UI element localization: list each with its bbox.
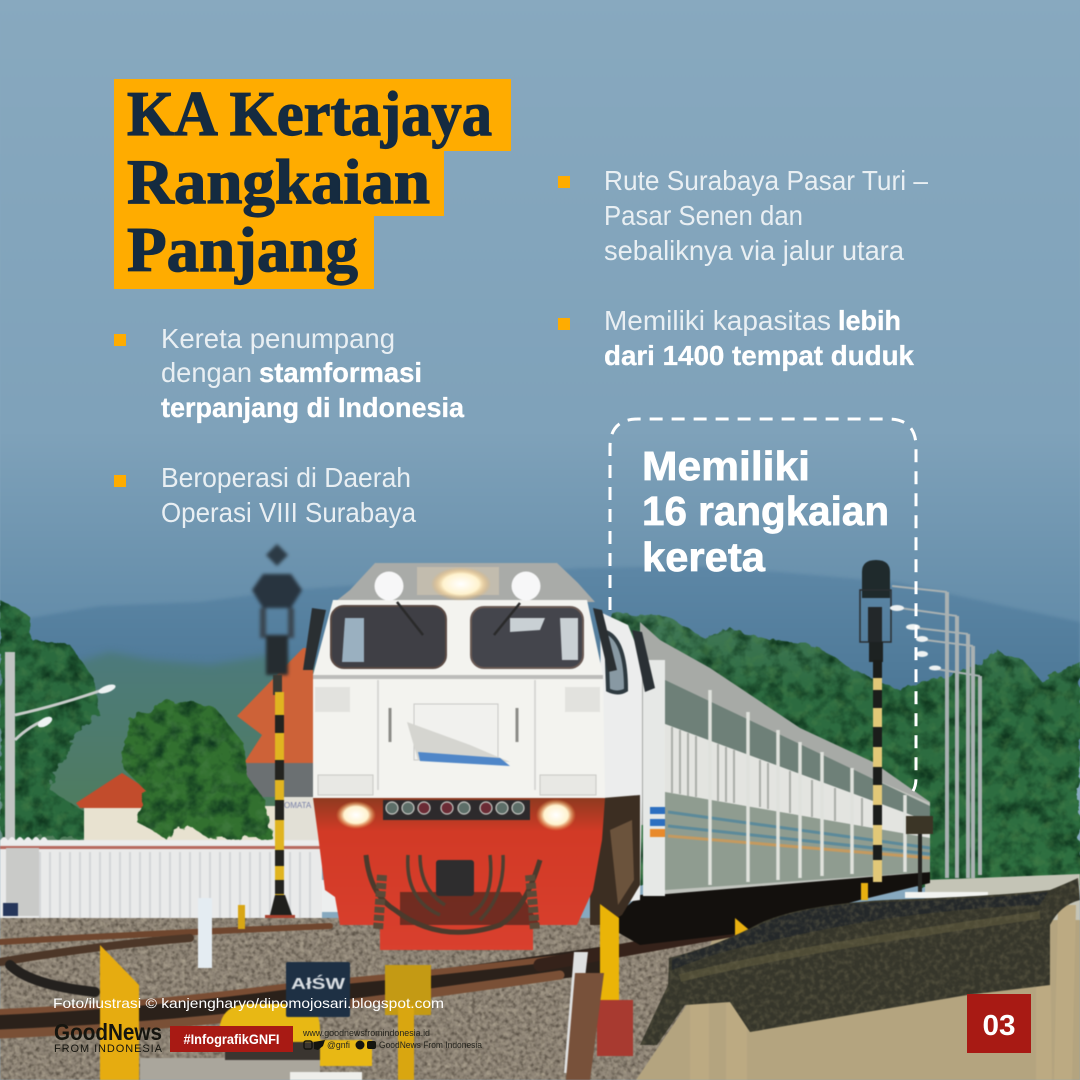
- coach dividers: [710, 690, 905, 885]
- callout text: Memiliki: [642, 443, 810, 489]
- footer links and social icons: [302, 1028, 482, 1050]
- top headlights: [374, 572, 404, 600]
- foreground: bamboo poles: [690, 905, 1076, 1080]
- ground: gravel and dry grass: [0, 874, 1080, 1080]
- vents: [315, 687, 600, 712]
- hazy tree line left: [0, 652, 330, 845]
- nose seams: [378, 680, 535, 790]
- left window: [331, 606, 446, 668]
- foreground: small yellow markers: [735, 883, 988, 938]
- houses with orange roofs: [76, 648, 324, 842]
- foreground: mirrored track sign: AłŚW: [291, 974, 346, 993]
- title: Rangkaian: [127, 147, 430, 217]
- hashtag badge: #InfografikGNFI: [184, 1032, 280, 1047]
- white station fence: [0, 837, 338, 922]
- cab body: [313, 600, 605, 798]
- page number: 03: [982, 1010, 1016, 1042]
- logo: GoodNews From Indonesia: [54, 1019, 163, 1055]
- logo blue: [418, 752, 510, 766]
- bullet: kapasitas: lebih: [838, 305, 901, 336]
- background photo: [0, 434, 1080, 1080]
- sky: [0, 0, 1080, 720]
- bullet: rute: sebaliknya via jalur utara: [604, 235, 904, 266]
- central green tree: [122, 700, 272, 840]
- bullet: daerah operasi: Operasi VIII Surabaya: [161, 497, 416, 528]
- panel line: [313, 675, 603, 679]
- red nose: [313, 798, 605, 950]
- distant mountains: [0, 566, 1080, 760]
- lower left headlight glow: [336, 801, 376, 829]
- window glare: [342, 618, 364, 662]
- bullet: stamformasi: [114, 323, 464, 423]
- title: [127, 79, 492, 285]
- louvre band: [665, 724, 930, 838]
- foreground: yellow track posts and boxes: [100, 898, 633, 1080]
- bogie dirt: [610, 820, 634, 905]
- loco side: [600, 612, 642, 905]
- bullet: rute: [558, 165, 928, 266]
- window band: [665, 680, 930, 822]
- foreground: mirrored track sign: [286, 962, 350, 1017]
- coach orange stripe: [668, 836, 930, 858]
- bullet: rute: Pasar Senen dan: [604, 200, 803, 231]
- indicator lights: [386, 802, 524, 814]
- right window glare: [510, 618, 578, 660]
- left railway signal: [252, 544, 302, 925]
- light housing: [417, 567, 499, 595]
- loco side window: [606, 632, 626, 692]
- bullet: kapasitas: [558, 305, 914, 371]
- louvre slats: [672, 727, 862, 826]
- left tree and lamp post: [0, 600, 117, 840]
- forest right: [612, 612, 1080, 885]
- lighting masts: [890, 586, 980, 878]
- lower band: [665, 792, 930, 890]
- callout text: 16 rangkaian: [642, 488, 889, 534]
- title: KA Kertajaya: [127, 79, 492, 149]
- wipers: [397, 602, 520, 635]
- top right headlight: [512, 572, 540, 600]
- cab handles: [390, 708, 517, 742]
- bullet: daerah operasi: Beroperasi di Daerah: [161, 462, 411, 493]
- photo credit: Foto/ilustrasi © kanjengharyo/dipomojosari.blogspot.com: [53, 995, 444, 1011]
- bullet: daerah operasi: [114, 462, 416, 528]
- callout text: [642, 443, 889, 580]
- coach roof: [640, 622, 930, 825]
- right mirror: [593, 608, 617, 672]
- coach stripe: [668, 812, 930, 854]
- logo swoosh: [407, 722, 510, 762]
- logo: GoodNews From Indonesia: FROM INDONESIA: [54, 1043, 163, 1055]
- passenger coaches: [640, 622, 930, 896]
- nose plates: [318, 775, 596, 795]
- door panel: [414, 704, 498, 760]
- coupler and hoses: [366, 855, 540, 932]
- right railway signal: [860, 560, 933, 898]
- bullet: kapasitas: Memiliki kapasitas: [604, 305, 831, 336]
- dashed callout outline: [610, 419, 916, 791]
- coach end panel with stripes: [643, 660, 665, 896]
- logo: GoodNews From Indonesia: GoodNews: [54, 1019, 162, 1045]
- bullet: stamformasi: Kereta penumpang: [161, 323, 395, 354]
- central headlight glow: [431, 567, 491, 601]
- footer links and social icons: GoodNews From Indonesia: [379, 1040, 482, 1050]
- bullet: stamformasi: terpanjang di Indonesia: [161, 392, 464, 423]
- locomotive: [303, 563, 655, 950]
- hashtag badge: [170, 1026, 293, 1052]
- railway tracks: [0, 926, 735, 1034]
- roof: [335, 563, 595, 602]
- bullet: stamformasi: stamformasi: [259, 357, 422, 388]
- bogie side: [590, 795, 640, 925]
- page number: [967, 994, 1031, 1053]
- title: Panjang: [127, 215, 358, 285]
- houses with orange roofs: OMATA: [284, 801, 312, 810]
- right window: [471, 607, 583, 668]
- footer links and social icons: @gnfi: [327, 1040, 350, 1050]
- callout text: kereta: [642, 534, 766, 580]
- title background: [114, 79, 511, 289]
- foreground: dark net fence: [640, 878, 1080, 1045]
- bullet: stamformasi: dengan: [161, 357, 252, 388]
- train undercarriage: [605, 870, 930, 945]
- lower right headlight glow: [536, 799, 576, 831]
- coach body: [643, 680, 930, 896]
- footer links and social icons: www.goodnewsfromindonesia.id: [302, 1028, 430, 1038]
- bullet: rute: Rute Surabaya Pasar Turi –: [604, 165, 928, 196]
- side mirror: [632, 630, 655, 692]
- left mirror: [303, 608, 326, 670]
- indicator light panel: [383, 800, 530, 820]
- bullet: kapasitas: dari 1400 tempat duduk: [604, 340, 914, 371]
